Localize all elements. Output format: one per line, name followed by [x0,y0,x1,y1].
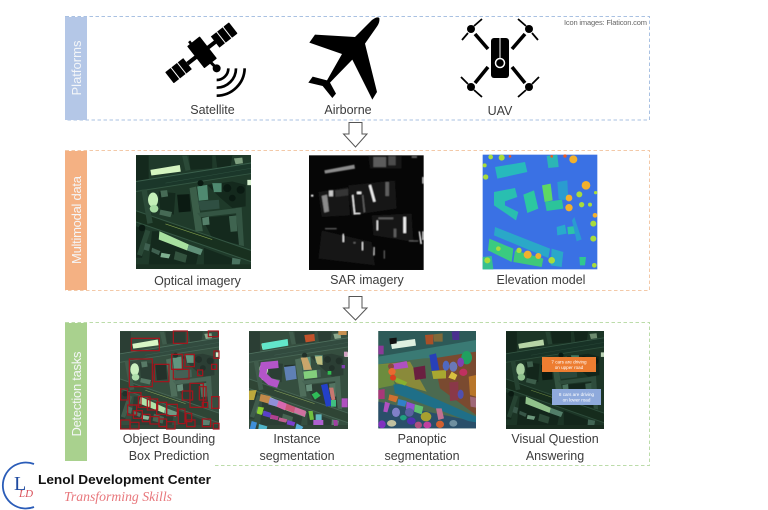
image: optical imagery [136,155,251,269]
logo mark: L [14,473,26,495]
callout: upper road [542,357,596,372]
icon: UAV drone [461,19,539,97]
callout: lower road: on lower road [563,398,591,402]
heading: platforms: Platforms [69,40,84,96]
arrow: data to tasks [344,296,367,320]
heading: detection tasks: Detection tasks [69,351,84,436]
logo mark [3,462,34,508]
logo tagline: Transforming Skills [64,490,173,505]
label: visual question answering: Answering [526,449,584,463]
icon: satellite [159,15,245,96]
label: satellite: Satellite [190,103,235,117]
image: visual question answering [506,331,604,429]
heading: multimodal data [65,151,87,290]
panel: platforms [65,15,650,120]
heading: multimodal data: Multimodal data [69,175,84,264]
image: instance segmentation [249,331,348,429]
label: instance segmentation: segmentation [259,449,335,463]
image: SAR imagery [309,155,424,270]
image: object bounding boxes [120,331,219,429]
arrow: platforms to data [344,122,367,147]
callout: upper road: on upper road [555,365,584,370]
heading: detection tasks [65,323,87,465]
callout: lower road: 8 cars are driving [559,392,595,397]
label: airborne: Airborne [324,103,372,117]
logo mark: LD [18,488,33,500]
label: visual question answering: Visual Question [511,432,599,446]
label: panoptic segmentation: segmentation [384,449,460,463]
panel: detection tasks [65,322,650,466]
icon: airplane [308,17,379,100]
image: elevation model [483,154,597,269]
callout: upper road: 7 cars are driving [551,360,587,364]
logo name: Lenol Development Center [38,472,211,487]
label: object bounding box prediction: Box Prediction [129,449,209,463]
credit: icon source: Icon images: Flaticon.com [564,18,647,27]
label: elevation model: Elevation model [497,273,585,287]
label: SAR imagery: SAR imagery [330,273,405,287]
logo: Lenol Development Center [0,461,213,510]
label: instance segmentation: Instance [273,432,321,446]
label: object bounding box prediction: Object Bounding [123,432,215,446]
callout: lower road [552,389,601,405]
panel: multimodal data [65,150,650,290]
label: optical imagery: Optical imagery [154,274,242,288]
image: panoptic segmentation [378,331,476,428]
label: UAV: UAV [488,104,513,118]
heading: platforms [65,17,87,120]
label: panoptic segmentation: Panoptic [398,432,446,446]
